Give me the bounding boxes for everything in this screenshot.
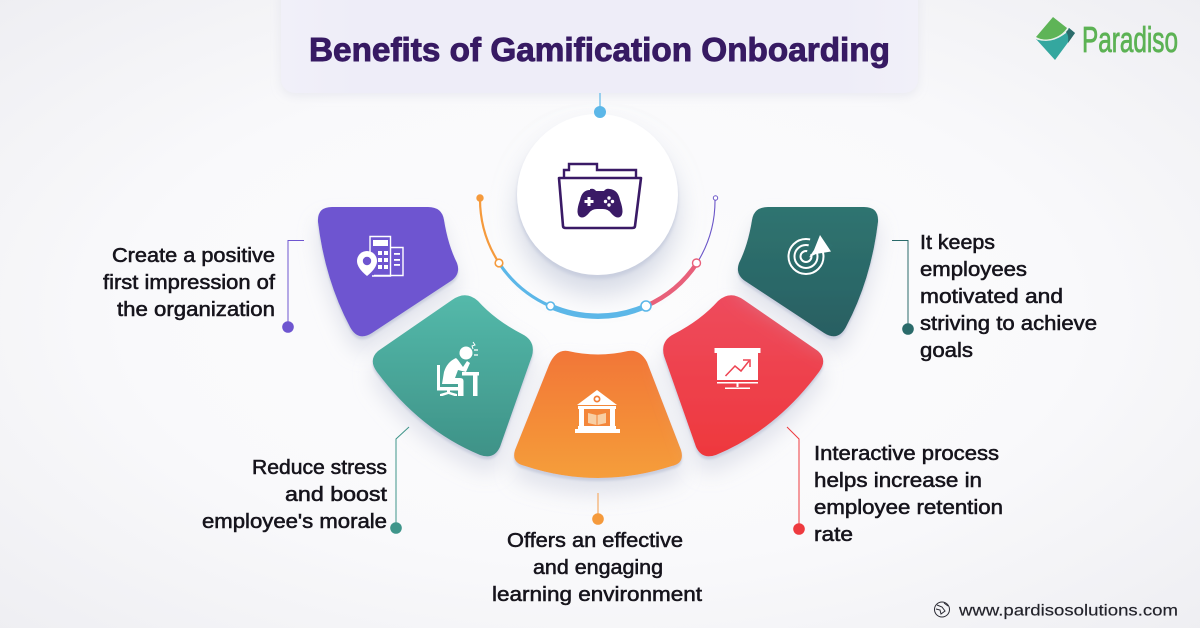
panel: red segment	[663, 295, 823, 456]
progress arc	[477, 195, 718, 316]
panel: teal segment	[373, 295, 533, 456]
logo: Paradiso	[1036, 17, 1178, 60]
connector: red	[787, 427, 805, 535]
icon: library building	[575, 390, 620, 433]
text: learning environment: and engaging	[533, 557, 663, 579]
text: learning environment	[492, 530, 702, 606]
text: reduce stress: employee's morale	[202, 511, 387, 533]
text: first impression	[103, 245, 275, 321]
text: retention	[814, 443, 1003, 546]
text: motivation	[920, 232, 1097, 362]
text: retention: employee retention	[814, 497, 1003, 519]
panel: orange segment	[514, 351, 682, 478]
text: learning environment: Offers an effective	[507, 530, 683, 552]
icon: game folder	[559, 164, 641, 228]
panel: dark teal segment	[738, 207, 878, 336]
text: reduce stress	[202, 457, 388, 533]
text: motivation: employees	[920, 259, 1027, 281]
text: reduce stress: and boost	[285, 484, 388, 506]
icon: stressed worker at desk	[437, 342, 479, 396]
icon: presentation board with chart	[714, 348, 760, 389]
icon: target with arrow	[788, 232, 834, 274]
text: motivation: goals	[920, 340, 973, 362]
website footer: www.pardisosolutions.com	[958, 602, 1178, 620]
connector: title to centre	[594, 93, 606, 118]
text: learning environment: learning environment	[492, 584, 702, 606]
text: motivation: It keeps	[920, 232, 995, 254]
text: retention: Interactive process	[814, 443, 999, 465]
text: first impression: the organization	[117, 299, 275, 321]
text: retention: helps increase in	[814, 470, 982, 492]
connector: orange	[592, 493, 604, 525]
icon: office building and pin	[357, 236, 403, 276]
text: reduce stress: Reduce stress	[252, 457, 387, 479]
connector: purple	[282, 240, 304, 333]
icon: globe	[934, 602, 950, 617]
panel: purple segment	[318, 207, 458, 336]
connector: teal	[390, 427, 409, 534]
title: Benefits of Gamification Onboarding	[309, 31, 890, 68]
title panel	[281, 0, 918, 93]
connector: dark teal	[892, 240, 914, 335]
text: retention: rate	[814, 524, 853, 546]
text: first impression: first impression of	[103, 272, 275, 294]
text: motivation: striving to achieve	[920, 313, 1097, 335]
text: first impression: Create a positive	[112, 245, 275, 267]
centre circle with folder icon	[517, 114, 678, 275]
text: motivation: motivated and	[920, 286, 1063, 308]
